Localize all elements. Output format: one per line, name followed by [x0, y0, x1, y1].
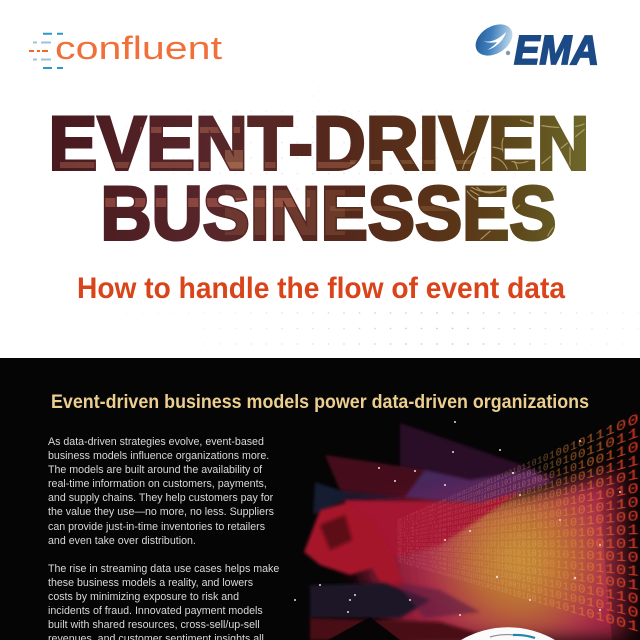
icon: globe swoosh — [470, 18, 518, 62]
subtitle: How to handle the flow of event data — [77, 272, 566, 305]
digits wall: 1000101101110010110100111010010110101100100110101110100101101001011011001011010010110101001011100 — [397, 412, 640, 522]
digits wall: 1011010010110101001011010011010110100101101001011010100101101001011010010110101001011010011010110 — [397, 494, 640, 538]
artwork: data stream — [294, 412, 640, 640]
body text: costs by minimizing exposure to risk and — [48, 591, 239, 603]
body text: can provide just-in-time inventories to retailers — [48, 521, 265, 533]
digits wall: 0101110100110100101101010010110100111010110100101011010010110101001011010010110100101011010010111 — [397, 452, 640, 530]
digits wall: 1100101101001011100101101001101011010010110101001011010010110100101110100110101001011010010110101 — [397, 466, 640, 533]
body text: The rise in streaming data use cases helps make — [48, 563, 279, 575]
digits wall: 1010010110100101101001011010010110101001011010010110100101101001110100101101010010110100101101001 — [397, 551, 640, 595]
badge: white circle — [461, 627, 555, 640]
digits wall: 1011001101000101101001011101001011010110100101101001011010010101101001110100101101010010110100110 — [397, 438, 640, 528]
body text: As data-driven strategies evolve, event-based — [48, 436, 264, 448]
title — [48, 102, 590, 256]
logo: Confluent — [29, 30, 222, 69]
digits wall: 0010110100101101001101011010010110100101101010010111010010110100101101010010110100101101001011010 — [397, 480, 640, 536]
body text: built with shared resources, cross-sell/up-sell — [48, 619, 260, 631]
body text: and even take over distribution. — [48, 535, 196, 547]
title line 1: EVENT-DRIVEN — [48, 102, 590, 186]
background dot pattern — [142, 96, 639, 345]
icon: stream dashes — [29, 34, 63, 68]
section heading: Event-driven business models power data-driven organizations — [51, 391, 589, 413]
title texture — [60, 120, 584, 240]
digits wall: 0101101001011010010110101100101101001011010100101101001011010010110101001011010010110100110101101 — [397, 549, 640, 581]
digits wall: 0101101001011010010110100101011010010110100101101001011010100101101001011010010110100110101101001 — [397, 559, 640, 637]
body text: the value they use—no more, no less. Suppliers — [48, 506, 274, 518]
body text: incidents of fraud. Innovated payment models — [48, 605, 263, 617]
digits wall: 1101001011010010110101001011010010110100101101010010110100101101001110100101101010010110100101101 — [397, 522, 640, 544]
wordmark: confluent — [55, 30, 222, 66]
body text: real-time information on customers, payments, — [48, 478, 267, 490]
title line 2: BUSINESSES — [100, 172, 556, 256]
body text: The models are built around the availability of — [48, 464, 262, 476]
body text: and supply chains. They help customers pay for — [48, 492, 273, 504]
digits wall: 0100101101011010010110100101101001110100101101010010110100101101001011010100101101011010010110100 — [397, 508, 640, 541]
body text: these business models a reality, and lowers — [48, 577, 253, 589]
digits wall: 1010010110100101101010010110100101101001011010010110100101101010010110100101101001011011010010110 — [397, 557, 640, 623]
logo: EMA — [476, 24, 599, 70]
body text — [48, 436, 279, 640]
digits wall: 0110100010111010010101100101101011010010110100101011010011101001011010011010110100101101010011011 — [397, 424, 640, 525]
panel: black section — [0, 358, 640, 640]
body text: business models influence organizations more. — [48, 450, 269, 462]
digits wall: 0101101010010110100101101001011010110100101101001011010100101101001011010010110100101011010010110 — [397, 554, 640, 609]
digits wall: 0010110100101101011010010110100101011010010110100110101101001011010010110100101101010010110100101 — [397, 536, 640, 553]
digits wall: 1101001011010010110100101101010010110100101101001011010010110101001011010011010010110100101101010 — [397, 546, 640, 567]
